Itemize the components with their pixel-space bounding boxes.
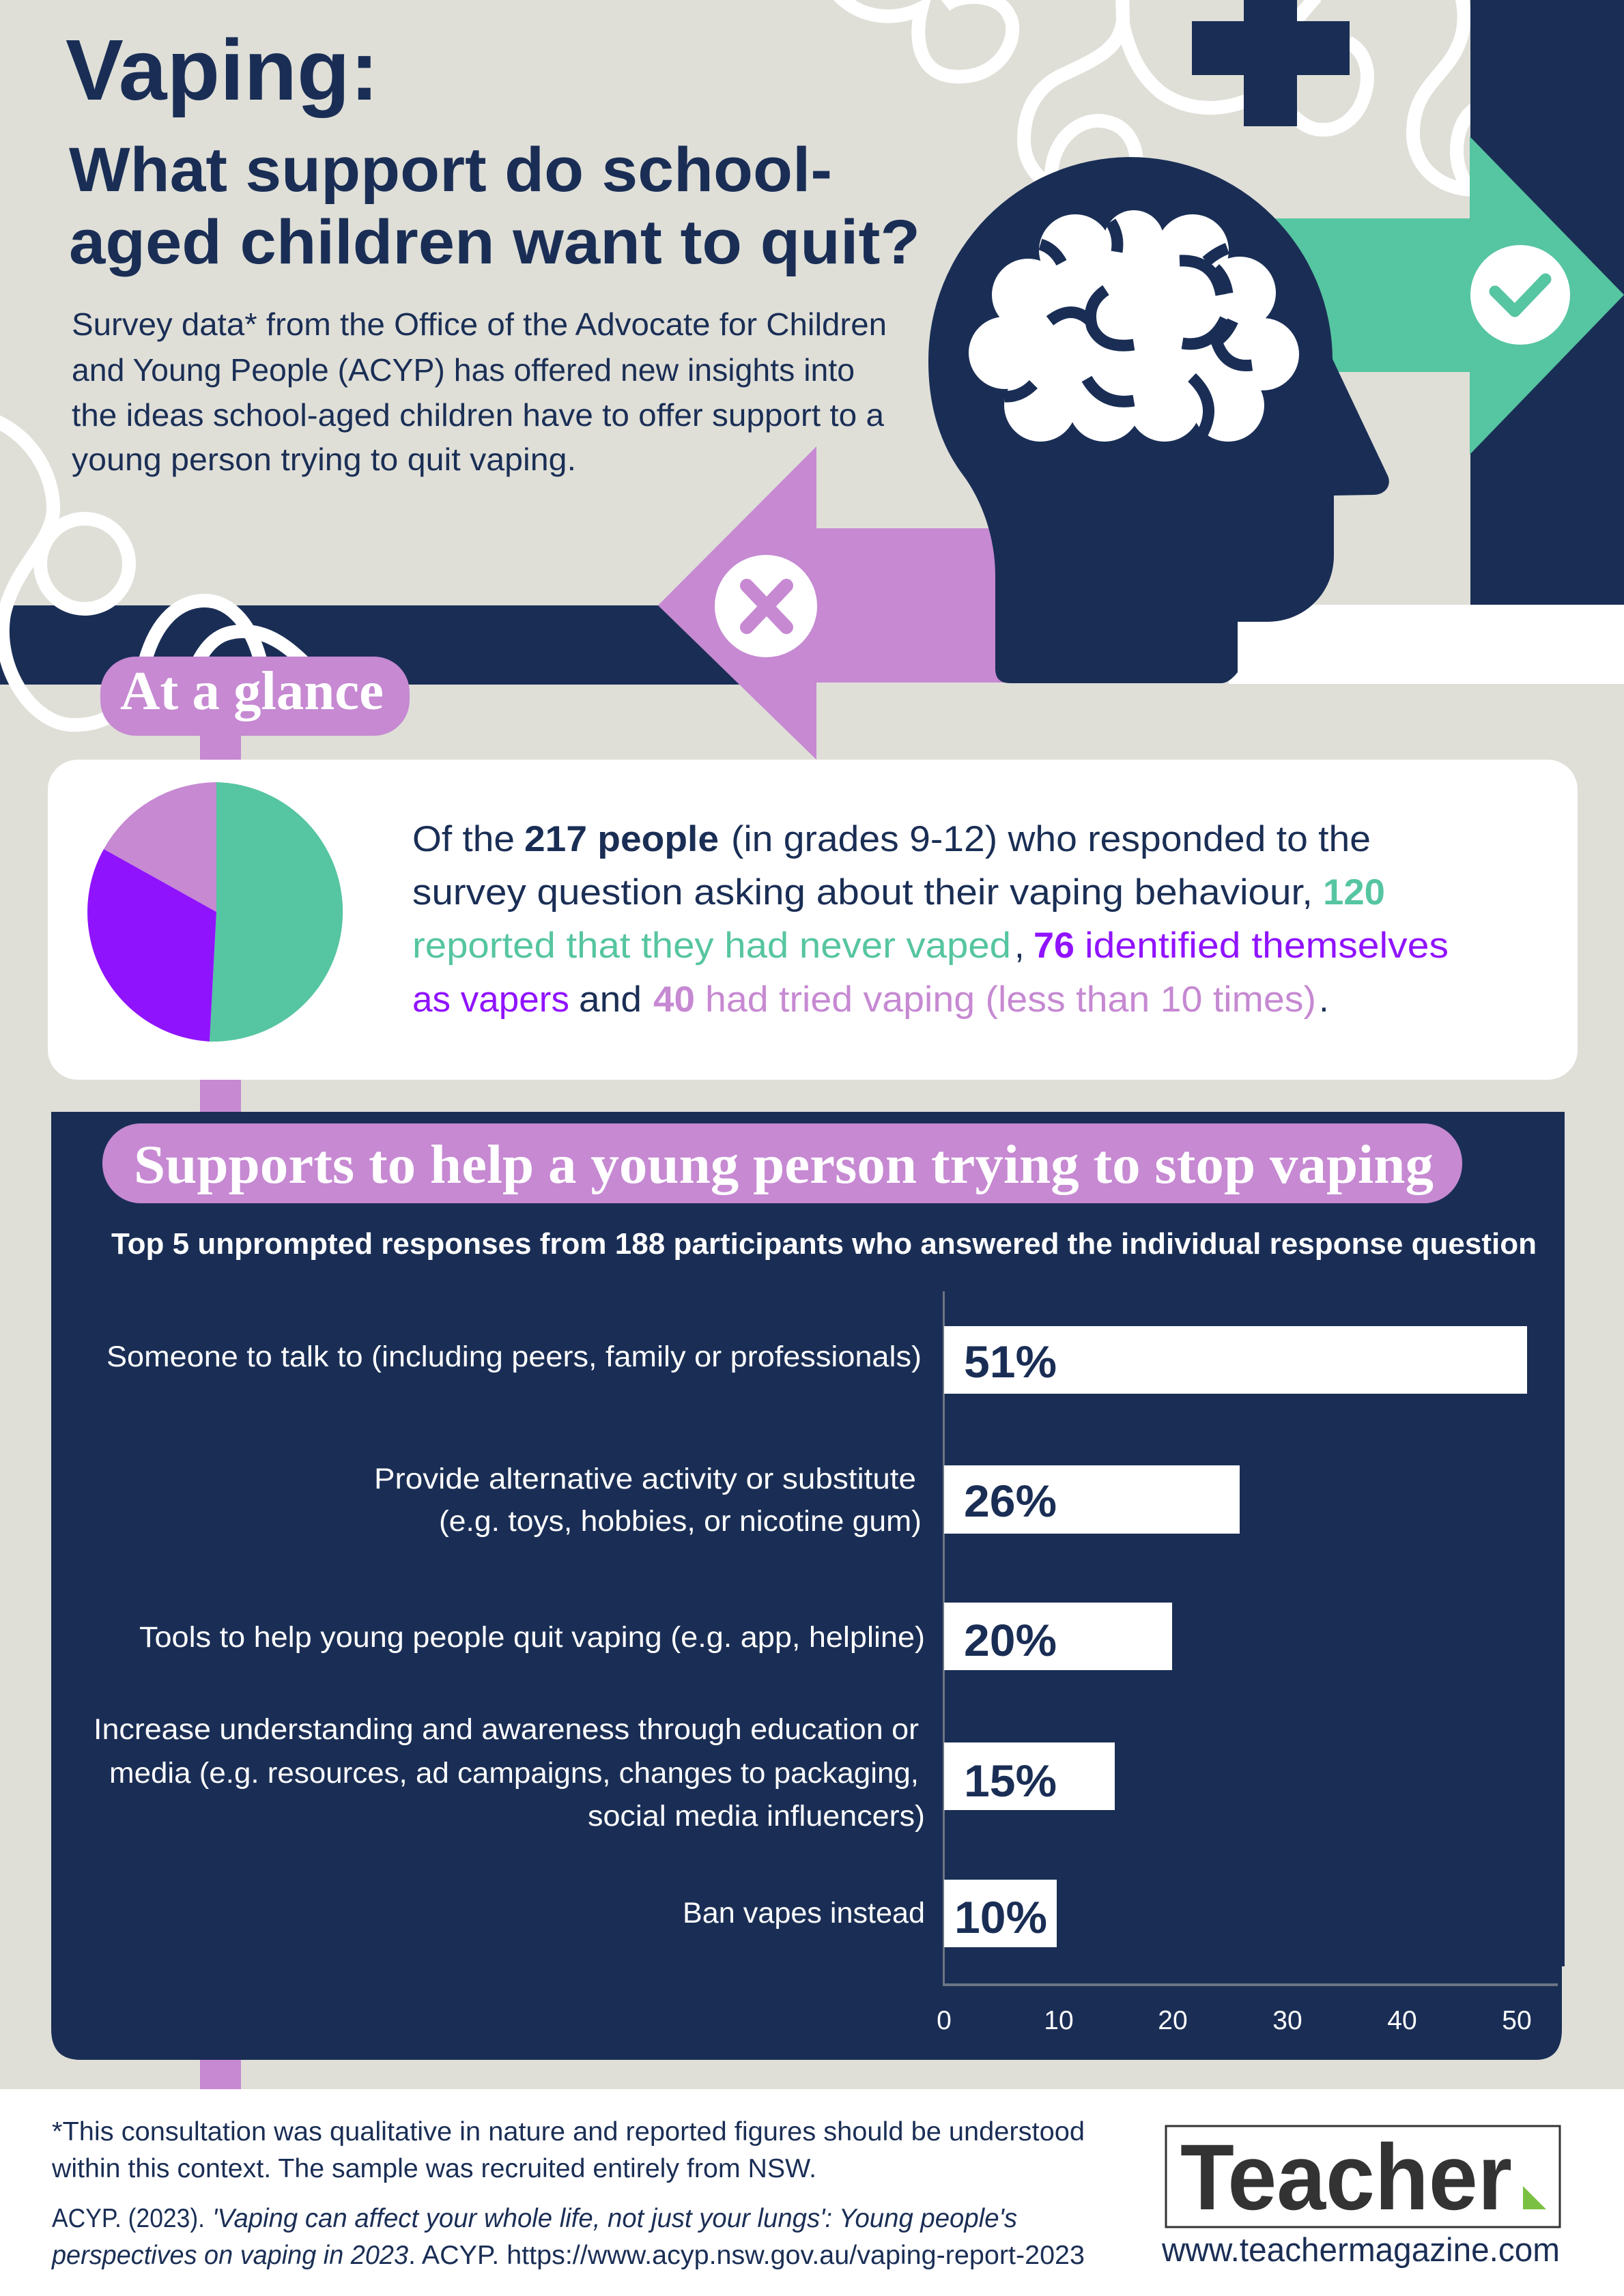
summary text: (in grades 9-12) who responded to the bbox=[731, 819, 1371, 859]
bar: ban vapes: 10% bbox=[954, 1892, 1047, 1942]
bar: alternative activity bbox=[374, 1463, 1240, 1538]
summary text: and bbox=[579, 979, 642, 1020]
arrow: purple left arrow with cross bbox=[658, 446, 1024, 760]
intro text: young person trying to quit vaping. bbox=[72, 442, 576, 477]
summary text bbox=[412, 819, 1449, 1020]
chart subtitle: Top 5 unprompted responses from 188 participants who answered the individual response question bbox=[111, 1227, 1537, 1261]
subtitle bbox=[69, 135, 920, 277]
icon: tick bbox=[1470, 245, 1570, 345]
heading: at a glance bbox=[100, 657, 410, 736]
axis labels: 0 bbox=[937, 2006, 952, 2035]
bar: alternative activity: 26% bbox=[964, 1476, 1057, 1526]
summary text: reported that they had never vaped bbox=[412, 925, 1011, 966]
summary text: 40 bbox=[653, 979, 695, 1020]
icon: head with brain bbox=[928, 157, 1389, 683]
bar: ban vapes bbox=[683, 1880, 1057, 1947]
bar: tools: 20% bbox=[964, 1615, 1057, 1665]
bar: someone to talk to: Someone to talk to (including peers, family or professionals) bbox=[106, 1340, 922, 1373]
bar: tools bbox=[139, 1603, 1172, 1670]
bar: alternative activity: Provide alternative activity or substitute bbox=[374, 1463, 916, 1495]
footnote: within this context. The sample was recruited entirely from NSW. bbox=[51, 2154, 816, 2183]
intro text: the ideas school-aged children have to offer support to a bbox=[72, 397, 884, 433]
white bar right bbox=[1229, 605, 1624, 684]
summary text: . bbox=[1319, 979, 1329, 1020]
summary text: Of the bbox=[412, 819, 515, 859]
connector line bbox=[200, 2054, 241, 2089]
navy bar left bbox=[0, 605, 751, 685]
intro text: and Young People (ACYP) has offered new insights into bbox=[72, 352, 855, 388]
heading: at a glance: At a glance bbox=[120, 661, 384, 721]
summary text: survey question asking about their vaping behaviour, bbox=[412, 872, 1313, 913]
connector line bbox=[200, 1075, 241, 1116]
intro text: Survey data* from the Office of the Advocate for Children bbox=[72, 306, 887, 342]
bar: someone to talk to bbox=[106, 1326, 1527, 1394]
summary text: 120 bbox=[1323, 872, 1385, 913]
summary text: , bbox=[1014, 925, 1025, 966]
bar chart bbox=[94, 1291, 1558, 2035]
icon: cross bbox=[715, 555, 817, 657]
subtitle: aged children want to quit? bbox=[69, 207, 920, 277]
pie chart bbox=[87, 782, 343, 1042]
bar: education bbox=[94, 1713, 1115, 1833]
summary text: had tried vaping (less than 10 times) bbox=[705, 979, 1316, 1020]
source citation: 'Vaping can affect your whole life, not just your lungs': Young people's bbox=[212, 2204, 1017, 2233]
logo: Teacher: Teacher bbox=[1180, 2125, 1512, 2230]
bar: education: media (e.g. resources, ad campaigns, changes to packaging, bbox=[109, 1757, 919, 1790]
panel: supports chart bbox=[51, 1112, 1565, 2060]
source citation: ACYP. (2023). bbox=[52, 2204, 205, 2233]
bar: education: 15% bbox=[964, 1755, 1057, 1806]
arrow: green right arrow with tick bbox=[1229, 137, 1624, 455]
title: Vaping: bbox=[66, 22, 379, 118]
axis labels bbox=[937, 2006, 1532, 2035]
footnote: *This consultation was qualitative in nature and reported figures should be understood bbox=[52, 2117, 1085, 2147]
panel: at a glance card bbox=[48, 760, 1578, 1080]
heading: supports bbox=[102, 1123, 1462, 1203]
bar: education: Increase understanding and awareness through education or bbox=[94, 1713, 919, 1746]
axis labels: 30 bbox=[1272, 2006, 1302, 2035]
connector line bbox=[200, 730, 241, 764]
axis labels: 50 bbox=[1502, 2006, 1532, 2035]
intro text bbox=[72, 306, 887, 477]
subtitle: What support do school- bbox=[69, 135, 832, 205]
heading: supports: Supports to help a young person trying to stop vaping bbox=[134, 1135, 1434, 1195]
icon: medical plus bbox=[1192, 0, 1350, 126]
source citation: . ACYP. https://www.acyp.nsw.gov.au/vaping-report-2023 bbox=[408, 2241, 1085, 2270]
website url: www.teachermagazine.com bbox=[1161, 2232, 1560, 2269]
navy block right bbox=[1470, 0, 1624, 605]
bar: education: social media influencers) bbox=[588, 1800, 925, 1833]
icon: brain bbox=[969, 210, 1299, 442]
axis labels: 20 bbox=[1158, 2006, 1188, 2035]
bar: alternative activity: (e.g. toys, hobbies, or nicotine gum) bbox=[439, 1505, 922, 1538]
bar: someone to talk to: 51% bbox=[964, 1336, 1057, 1387]
bar: ban vapes: Ban vapes instead bbox=[683, 1897, 925, 1929]
axis labels: 10 bbox=[1044, 2006, 1074, 2035]
source citation bbox=[51, 2204, 1085, 2270]
source citation: perspectives on vaping in 2023 bbox=[51, 2241, 408, 2270]
summary text: 76 bbox=[1034, 925, 1074, 966]
summary text: 217 people bbox=[524, 819, 719, 859]
axis labels: 40 bbox=[1387, 2006, 1417, 2035]
bar: tools: Tools to help young people quit vaping (e.g. app, helpline) bbox=[139, 1621, 925, 1654]
summary text: as vapers bbox=[412, 979, 569, 1020]
summary text: identified themselves bbox=[1085, 925, 1449, 966]
footnote bbox=[51, 2117, 1085, 2183]
